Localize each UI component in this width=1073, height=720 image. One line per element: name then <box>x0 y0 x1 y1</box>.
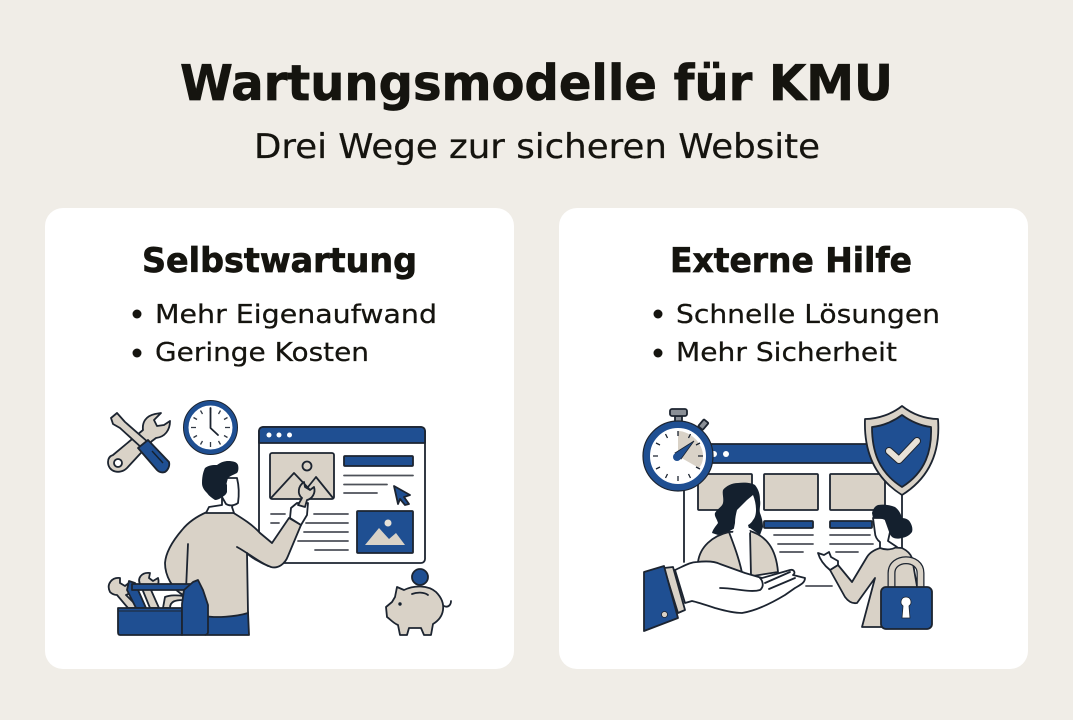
icon: wall clock <box>184 400 238 454</box>
hair <box>712 483 763 535</box>
text lines in browser <box>271 456 413 550</box>
torso and arm <box>165 512 301 617</box>
heading: Externe Hilfe: Externe Hilfe <box>670 241 912 281</box>
icon: mouse cursor <box>394 486 410 505</box>
illustration: man with wrench <box>165 461 315 635</box>
body and arm <box>830 547 918 627</box>
icon: piggy bank with coin <box>386 569 451 635</box>
subtitle: Drei Wege zur sicheren Website <box>254 127 820 167</box>
image thumbnail blue <box>357 511 413 553</box>
hand <box>818 552 838 570</box>
bullet list right: Schnelle Lösungen <box>676 300 940 330</box>
icon: security shield <box>865 406 938 495</box>
illustration: website frame <box>684 444 902 586</box>
icon: stopwatch <box>643 409 713 491</box>
heading: Selbstwartung: Selbstwartung <box>142 241 417 281</box>
hair <box>872 505 912 539</box>
illustration: open hand <box>644 561 805 631</box>
face and neck <box>733 495 756 537</box>
bullet list right: Mehr Sicherheit <box>676 338 897 368</box>
face and neck <box>873 518 897 549</box>
title: Wartungsmodelle für KMU <box>180 55 893 112</box>
bullet list left: Mehr Eigenaufwand <box>155 300 437 330</box>
jeans <box>205 612 249 635</box>
image placeholder <box>270 453 334 499</box>
illustration: woman in centre <box>698 483 778 578</box>
illustration: browser window <box>259 427 425 563</box>
panel background left <box>45 208 514 669</box>
hand with wrench <box>290 503 308 525</box>
illustration: woman on right <box>818 505 918 627</box>
bullet list left: Geringe Kosten <box>155 338 369 368</box>
hair <box>202 461 238 500</box>
panel: Externe Hilfe <box>559 208 1028 669</box>
panel background right <box>559 208 1028 669</box>
panel: Selbstwartung <box>45 208 514 669</box>
body <box>698 531 778 578</box>
icon: padlock <box>881 560 932 629</box>
icon: crossed wrench and screwdriver <box>108 413 170 472</box>
icon: toolbox <box>109 573 208 635</box>
bullet list right <box>654 300 940 368</box>
bullet list left <box>132 300 437 368</box>
face <box>222 478 239 505</box>
neck and collar <box>206 498 236 513</box>
